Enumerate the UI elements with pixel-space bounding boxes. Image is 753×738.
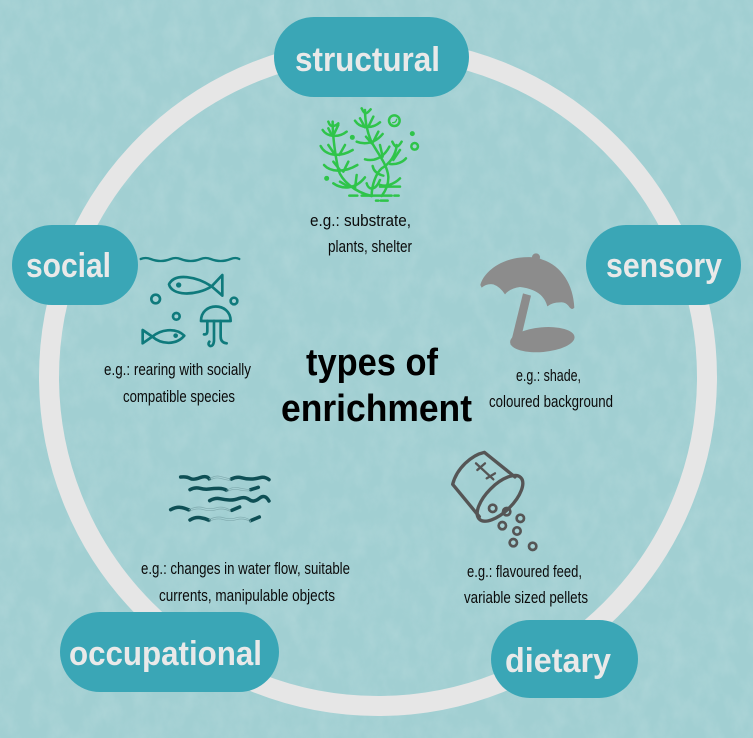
pill: social [12,225,138,305]
pill: social: social [26,247,111,285]
text: dietary examples [464,563,588,607]
text: dietary examples: e.g.: flavoured feed, [467,563,582,581]
text: occupational examples: currents, manipulable objects [159,587,335,605]
text: dietary examples: variable sized pellets [464,589,588,607]
text: sensory examples: coloured background [489,393,613,411]
text: social examples: compatible species [123,388,235,406]
text: social examples [104,361,252,406]
text: occupational examples: e.g.: changes in water flow, suitable [141,560,350,578]
title: enrichment [281,388,472,430]
icon: feed container [453,452,536,550]
text: sensory examples: e.g.: shade, [516,367,581,385]
ring [49,48,707,706]
icon: fish and jellyfish [141,258,239,346]
text: structural examples: plants, shelter [328,238,412,256]
text: sensory examples [489,367,613,411]
pill: occupational: occupational [69,635,262,673]
text: structural examples [310,212,412,256]
pill: structural: structural [295,41,440,79]
pill: structural [274,17,469,97]
icon: aquatic plant [321,108,418,201]
text: structural examples: e.g.: substrate, [310,212,411,230]
text: occupational examples [141,560,350,605]
pill: dietary: dietary [505,642,611,680]
title [281,342,472,430]
pill: sensory: sensory [606,247,722,285]
icon: shade umbrella [480,253,576,355]
pill: dietary [491,620,638,698]
pill: occupational [60,612,279,692]
text: social examples: e.g.: rearing with socially [104,361,252,379]
icon: water currents [171,476,269,522]
title: types of [306,342,438,384]
pill: sensory [586,225,741,305]
